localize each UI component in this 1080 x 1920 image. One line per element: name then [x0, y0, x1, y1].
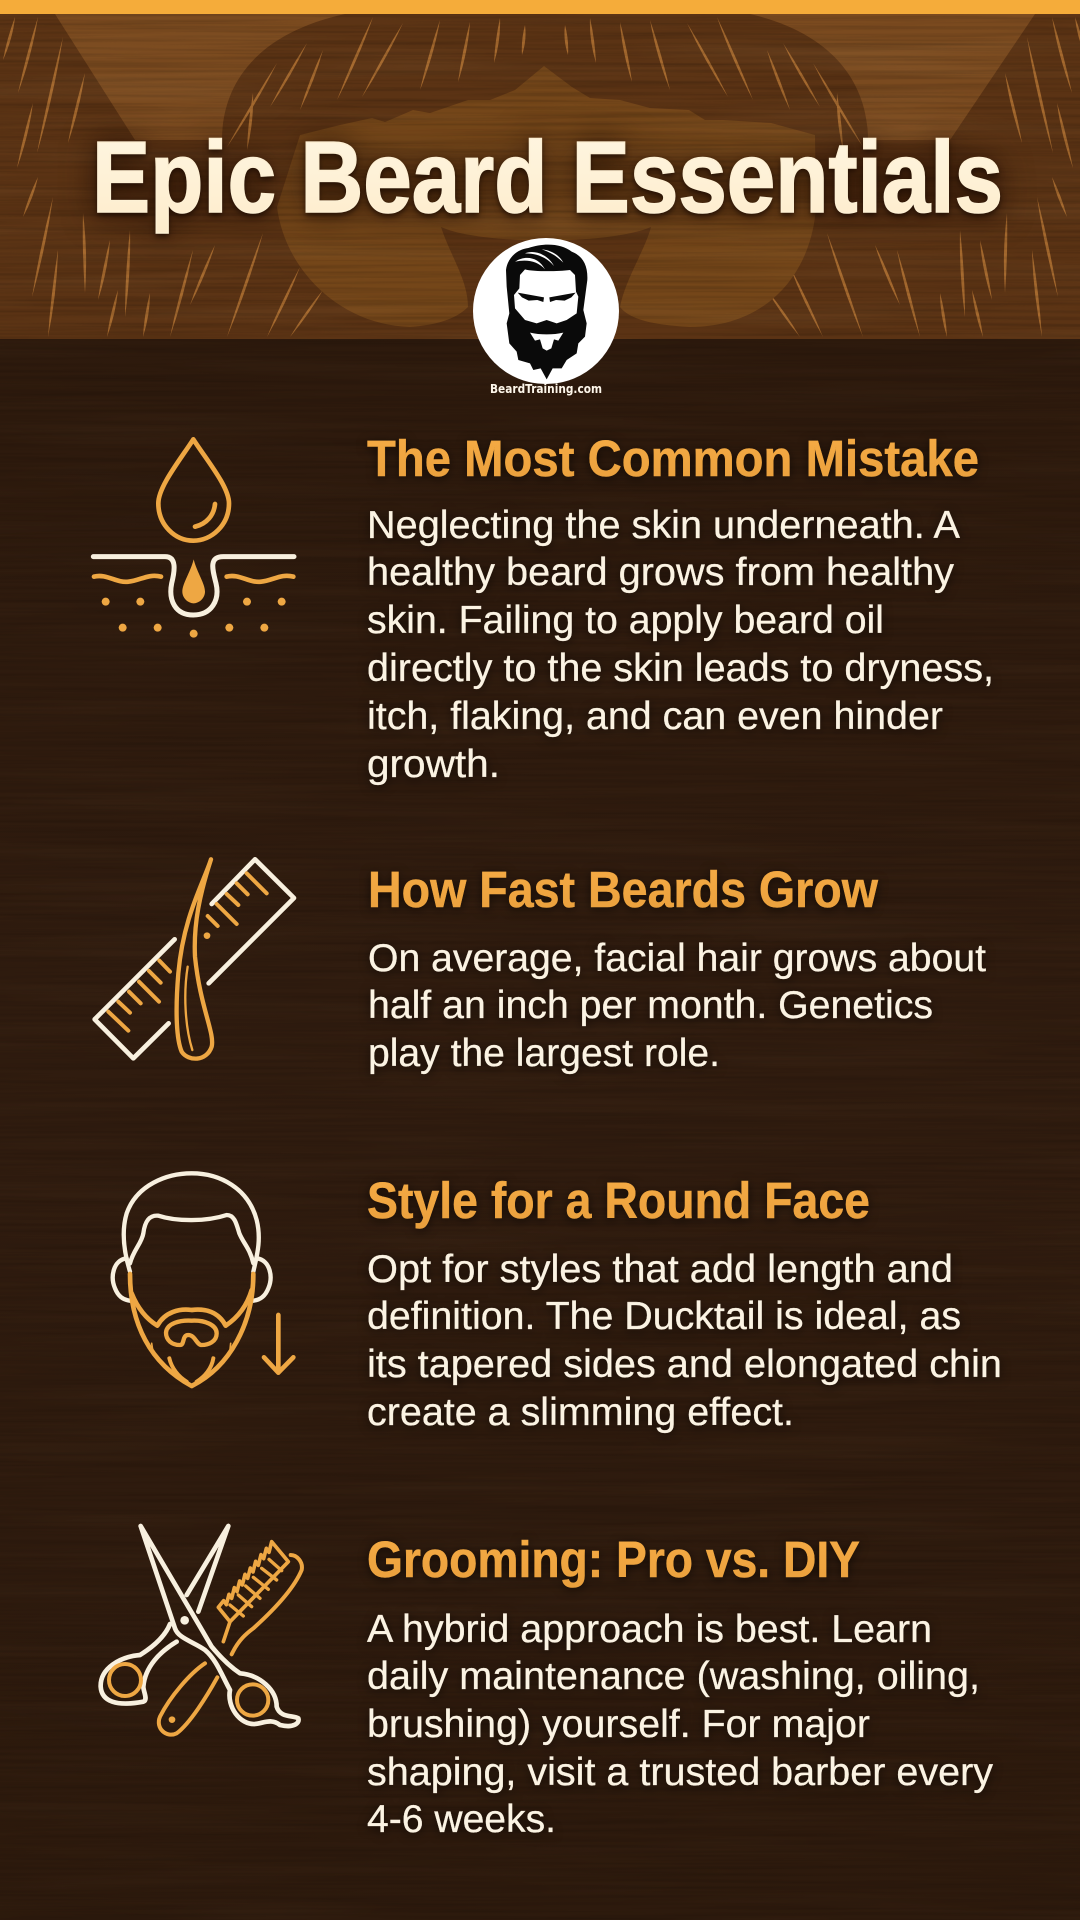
- header panel: wood with beard silhouette: [0, 14, 1080, 339]
- icon: brows and eyes: [518, 293, 576, 302]
- body text: directly to the skin leads to dryness,: [367, 647, 994, 690]
- heading: Style for a Round Face: [367, 1172, 870, 1229]
- icon: hair and beard silhouette: [506, 245, 587, 379]
- panel: most common mistake: [93, 430, 994, 786]
- body text: [367, 504, 994, 786]
- icon: chin patch: [530, 333, 563, 351]
- body text: daily maintenance (washing, oiling,: [367, 1655, 980, 1698]
- body text: play the largest role.: [368, 1032, 720, 1075]
- body text: its tapered sides and elongated chin: [367, 1343, 1002, 1386]
- body text: skin. Failing to apply beard oil: [367, 599, 884, 642]
- body text: create a slimming effect.: [367, 1391, 794, 1434]
- heading: The Most Common Mistake: [367, 430, 979, 487]
- icon: hair against ruler: [95, 859, 294, 1059]
- top accent bar: [0, 0, 1080, 14]
- icon: face with ducktail beard and down arrow: [113, 1173, 293, 1386]
- body text: On average, facial hair grows about: [368, 937, 986, 980]
- heading: Grooming: Pro vs. DIY: [367, 1531, 860, 1588]
- body text: brushing) yourself. For major: [367, 1703, 870, 1746]
- heading: How Fast Beards Grow: [368, 861, 878, 918]
- body text: [367, 1608, 994, 1841]
- lighter wood: upper-left corner: [55, 14, 345, 140]
- body text: healthy beard grows from healthy: [367, 551, 955, 594]
- logo: bearded man badge: [473, 238, 619, 396]
- body text: Opt for styles that add length and: [367, 1248, 953, 1291]
- body text: half an inch per month. Genetics: [368, 984, 933, 1027]
- lighter wood: face and cheek lobes: [277, 66, 816, 327]
- body text: Neglecting the skin underneath. A: [367, 504, 960, 547]
- body text: definition. The Ducktail is ideal, as: [367, 1295, 961, 1338]
- lighter wood: upper-right corner: [750, 14, 1035, 140]
- body text: itch, flaking, and can even hinder: [367, 695, 943, 738]
- icon: oil drop on skin follicle: [93, 439, 294, 638]
- body text: 4-6 weeks.: [367, 1798, 556, 1841]
- logo caption: BeardTraining.com: [490, 381, 602, 396]
- body text: [368, 937, 986, 1075]
- panel: style for a round face: [113, 1172, 1002, 1434]
- body text: [367, 1248, 1002, 1434]
- body text: growth.: [367, 743, 500, 786]
- icon: scissors and beard brush: [101, 1526, 302, 1735]
- body text: A hybrid approach is best. Learn: [367, 1608, 932, 1651]
- icon: hair highlights: [515, 249, 563, 269]
- panel: grooming pro vs diy: [101, 1526, 994, 1841]
- body text: shaping, visit a trusted barber every: [367, 1751, 994, 1794]
- icon: face: [514, 269, 578, 323]
- panel: how fast beards grow: [95, 859, 986, 1075]
